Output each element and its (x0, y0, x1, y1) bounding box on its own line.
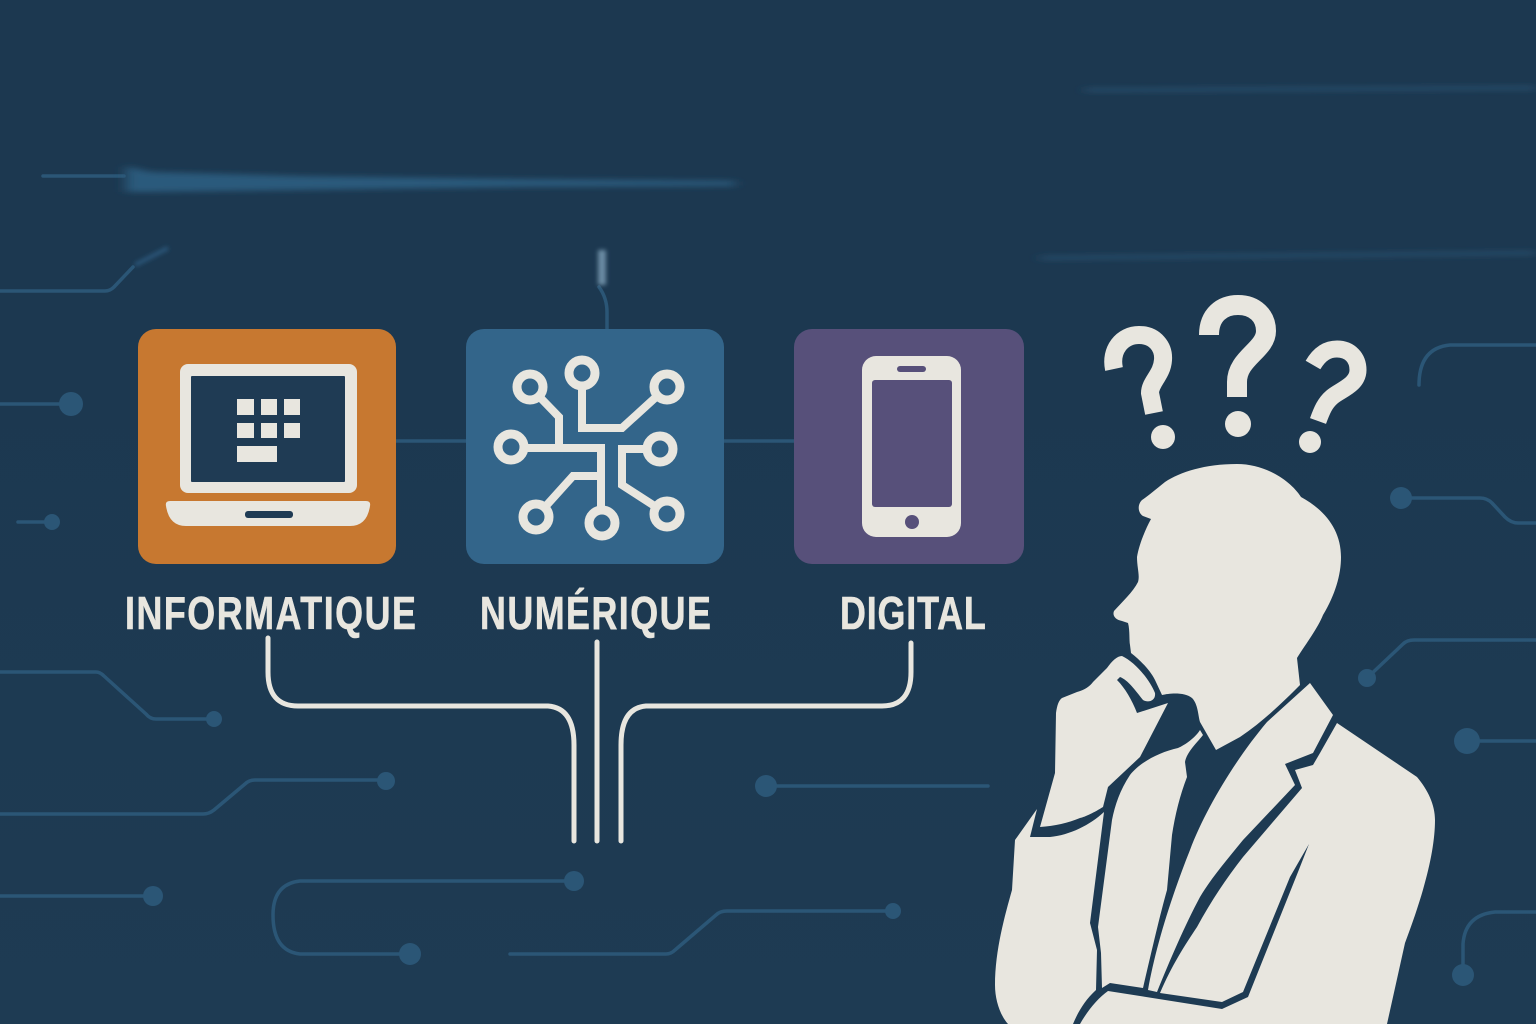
connector arrows: converging lines (268, 638, 911, 841)
icon: middle question mark (1209, 305, 1266, 437)
panel: informatique icon (138, 329, 396, 564)
head and neck (1113, 464, 1341, 750)
blurred streaks (126, 88, 1536, 285)
sleeve (995, 809, 1104, 1024)
person silhouette (995, 464, 1435, 1024)
panel: numerique icon (466, 329, 724, 564)
icon: question marks (1113, 305, 1358, 453)
icon: circuit (498, 360, 680, 536)
panel: digital icon (794, 329, 1024, 564)
background circuit traces (0, 176, 1536, 986)
jacket front (1098, 730, 1203, 988)
icon: left question mark (1113, 335, 1175, 449)
label: informatique: INFORMATIQUE (125, 588, 416, 639)
icon: laptop (166, 364, 370, 526)
icon: right question mark (1299, 349, 1358, 453)
lapel (1148, 683, 1333, 992)
icon: smartphone (862, 356, 961, 537)
jacket body and forearm (1080, 723, 1435, 1024)
label: numerique: NUMÉRIQUE (480, 588, 711, 639)
label: digital: DIGITAL (840, 588, 986, 639)
hand (1040, 656, 1168, 827)
